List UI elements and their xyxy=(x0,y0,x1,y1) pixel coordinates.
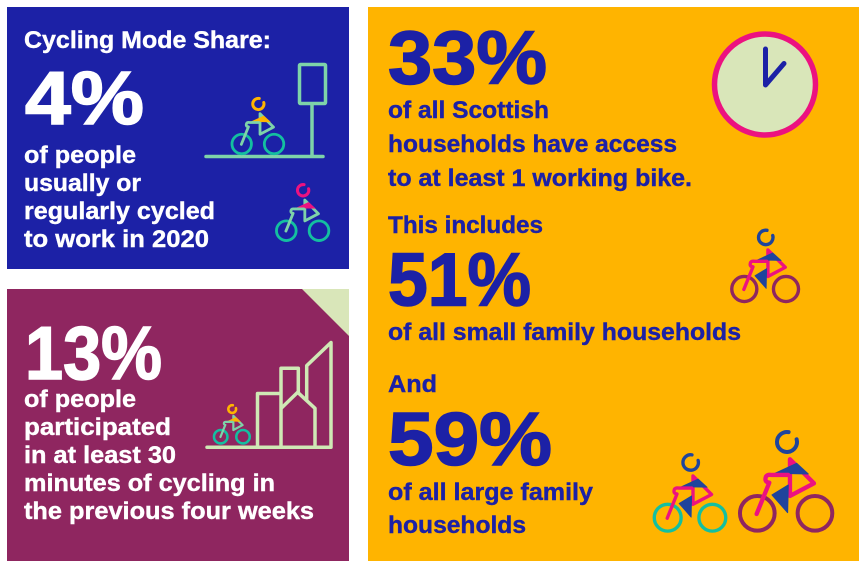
text: participated in cycling: minutes of cycling in xyxy=(24,470,275,497)
text: this includes: This includes xyxy=(388,212,543,239)
panel: cycling mode share xyxy=(7,7,349,269)
text: participated in cycling: in at least 30 xyxy=(24,442,176,469)
text: households with access: to at least 1 working bike. xyxy=(388,165,692,192)
icon: clock xyxy=(714,34,816,135)
text: cycled to work: usually or xyxy=(24,170,141,197)
text: and: And xyxy=(388,371,437,398)
stat: 4%: 4% xyxy=(25,56,144,140)
text: large family households: households xyxy=(388,512,526,539)
icon: large cyclist xyxy=(740,432,832,531)
icon: cyclist on skyline xyxy=(214,405,250,443)
panel: household bike access xyxy=(368,7,859,561)
stat: 51%: 51% xyxy=(388,238,531,322)
text: participated in cycling: of people xyxy=(24,386,136,413)
text: participated in cycling: participated xyxy=(24,414,171,441)
heading: cycling mode share: Cycling Mode Share: xyxy=(24,27,271,54)
text: households with access: households have access xyxy=(388,131,677,158)
text: large family households xyxy=(388,479,594,539)
text: cycled to work: to work in 2020 xyxy=(24,226,209,253)
panel: physical participation xyxy=(7,289,349,561)
corner fold xyxy=(302,289,349,336)
text: cycled to work: of people xyxy=(24,142,136,169)
icon: small family cyclist xyxy=(732,230,799,302)
icon: road and sign xyxy=(206,64,326,156)
text: households with access xyxy=(388,97,692,192)
icon: cyclist with yellow head xyxy=(232,98,284,154)
stat: 59%: 59% xyxy=(388,397,552,481)
icon: cyclist with pink head xyxy=(276,185,329,241)
text: large family households: of all large family xyxy=(388,479,594,506)
text: small family households: of all small family households xyxy=(388,319,741,346)
text: participated in cycling xyxy=(24,386,314,525)
icon: teal wheeled cyclist xyxy=(654,455,726,531)
stat: 13%: 13% xyxy=(25,311,162,395)
text: cycled to work: regularly cycled xyxy=(24,198,215,225)
stat: 33%: 33% xyxy=(388,16,547,100)
text: participated in cycling: the previous four weeks xyxy=(24,498,314,525)
text: households with access: of all Scottish xyxy=(388,97,549,124)
icon: city skyline xyxy=(207,342,331,447)
text: cycled to work xyxy=(24,142,215,253)
